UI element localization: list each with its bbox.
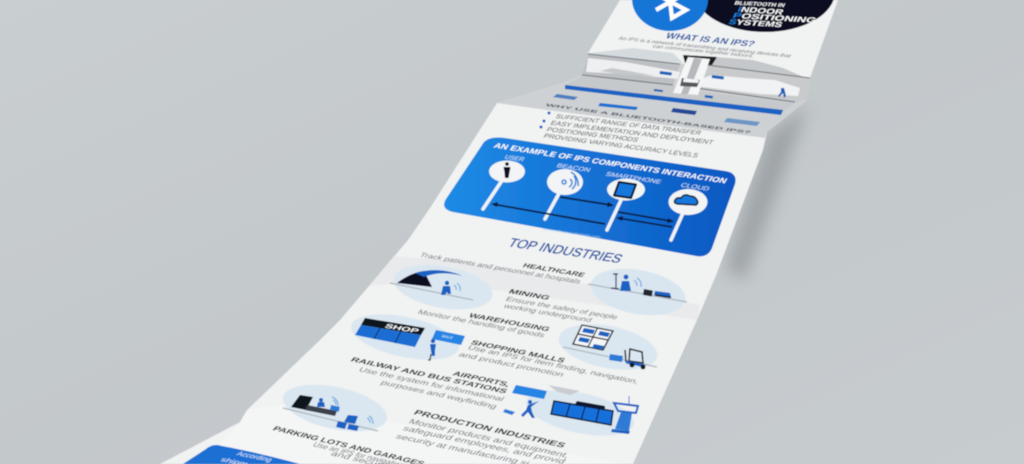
paper sheet [160, 0, 838, 464]
title text: POSITIONING [731, 12, 818, 25]
text: shopping malls: SHOPPING MALLS [469, 338, 567, 364]
bullet list: POSITIONING METHODS [545, 127, 640, 144]
panel: production industries: security at manufacturing si [394, 433, 532, 464]
heading: top industries: TOP INDUSTRIES [505, 236, 626, 266]
heading: what is an IPS: WHAT IS AN IPS? [664, 31, 757, 49]
title text: BLUETOOTH IN [733, 1, 786, 9]
floor bands [582, 54, 680, 85]
illustration: airport [503, 382, 638, 444]
blue icons [660, 71, 672, 75]
lollipop: user: USER [503, 154, 526, 163]
arrows [491, 197, 674, 227]
illustration: shop: SALE [440, 334, 455, 340]
panel: folded illustration strip [497, 48, 810, 138]
fold shading lower [200, 404, 625, 464]
icon: bluetooth [656, 0, 686, 18]
panel: production industries [279, 376, 572, 464]
panel: airports, railway and bus stations: purposes and wayfinding [379, 379, 499, 410]
panel: warehousing: Monitor the handling of goods [416, 308, 548, 339]
black title circle [695, 0, 835, 32]
mountains [588, 48, 683, 63]
blue strip [565, 85, 783, 115]
bullet list [540, 112, 715, 159]
panel: shopping malls [347, 306, 641, 385]
illustration: shop: SHOP [383, 324, 420, 335]
illustration: mine [390, 258, 496, 316]
panel: warehousing [416, 308, 661, 377]
illustration: hospital [587, 262, 689, 322]
bullet list: SUFFICIENT RANGE OF DATA TRANSFER [554, 114, 702, 137]
text: mining: MINING [507, 287, 553, 302]
panel: healthcare [418, 251, 689, 322]
panel: IPS components interaction [444, 138, 736, 256]
lollipop: beacon [545, 163, 592, 219]
bullet list: PROVIDING VARYING ACCURACY LEVELS [542, 133, 700, 159]
lollipop: cloud: CLOUD [679, 182, 711, 192]
panel: shopping malls: and product promotion [457, 350, 566, 378]
panel: airports, railway and bus stations [349, 356, 638, 444]
panel: shopping malls: Use an IPS for item finding, navigation, [466, 343, 641, 385]
floor lines [582, 54, 810, 102]
white clouds [586, 58, 680, 79]
illustration: production [279, 376, 391, 440]
panel: mining [390, 258, 620, 324]
text: IPS definition: An IPS is a network of transmitting and receiving devices that [617, 36, 792, 59]
heading: why use a bluetooth based IPS: WHY USE A BLUETOOTH-BASED IPS? [544, 103, 752, 135]
illustration: shop [347, 306, 465, 368]
panel: mining: working underground [501, 302, 594, 324]
text: healthcare: HEALTHCARE [521, 261, 587, 279]
fold shading [370, 256, 700, 320]
heading: components interaction: AN EXAMPLE OF IPS COMPONENTS INTERACTION [492, 141, 729, 185]
panel: airports, railway and bus stations: RAILWAY AND BUS STATIONS [349, 356, 510, 395]
illustration: warehouse [555, 317, 661, 377]
panel: parking lots and garages: PARKING LOTS AND GARAGES [271, 425, 427, 464]
title text: INDOOR [736, 5, 785, 16]
folded paper infographic [160, 0, 838, 464]
text: airports: AIRPORTS, [451, 370, 512, 388]
blue bluetooth circle [632, 0, 708, 31]
strip details [598, 103, 638, 110]
lollipop: smartphone: SMARTPHONE [604, 171, 663, 185]
panel: mining: Ensure the safety of people [504, 295, 620, 321]
lollipop: cloud [668, 182, 711, 240]
lollipop: user [483, 154, 526, 209]
paper shadow [725, 105, 808, 280]
bullet list: EASY IMPLEMENTATION AND DEPLOYMENT [549, 120, 715, 146]
text: IPS definition: can communicate together indoors. [651, 44, 755, 59]
panel: production industries: safeguard employees, and provid [401, 425, 568, 464]
title text [727, 1, 818, 29]
shaft [683, 55, 717, 65]
lollipop: smartphone [604, 171, 663, 230]
text: production industries: PRODUCTION INDUSTRIES [412, 409, 568, 449]
panel: header [632, 0, 835, 32]
panel: healthcare: Track patients and personnel at hospitals [418, 251, 584, 285]
panel: production industries: Monitor products and equipment, [407, 418, 572, 460]
panel: airports, railway and bus stations: Use the system for informational [357, 366, 507, 403]
text: warehousing: WAREHOUSING [467, 311, 553, 333]
panel: market callout: According [235, 450, 274, 463]
panel: parking lots and garages [271, 425, 427, 464]
title text: SYSTEMS [727, 18, 785, 29]
source url: www.infragroupindoors.com [542, 228, 602, 239]
panel: market callout [183, 445, 300, 464]
lollipop: beacon: BEACON [555, 163, 592, 174]
lower grey band [565, 76, 795, 112]
